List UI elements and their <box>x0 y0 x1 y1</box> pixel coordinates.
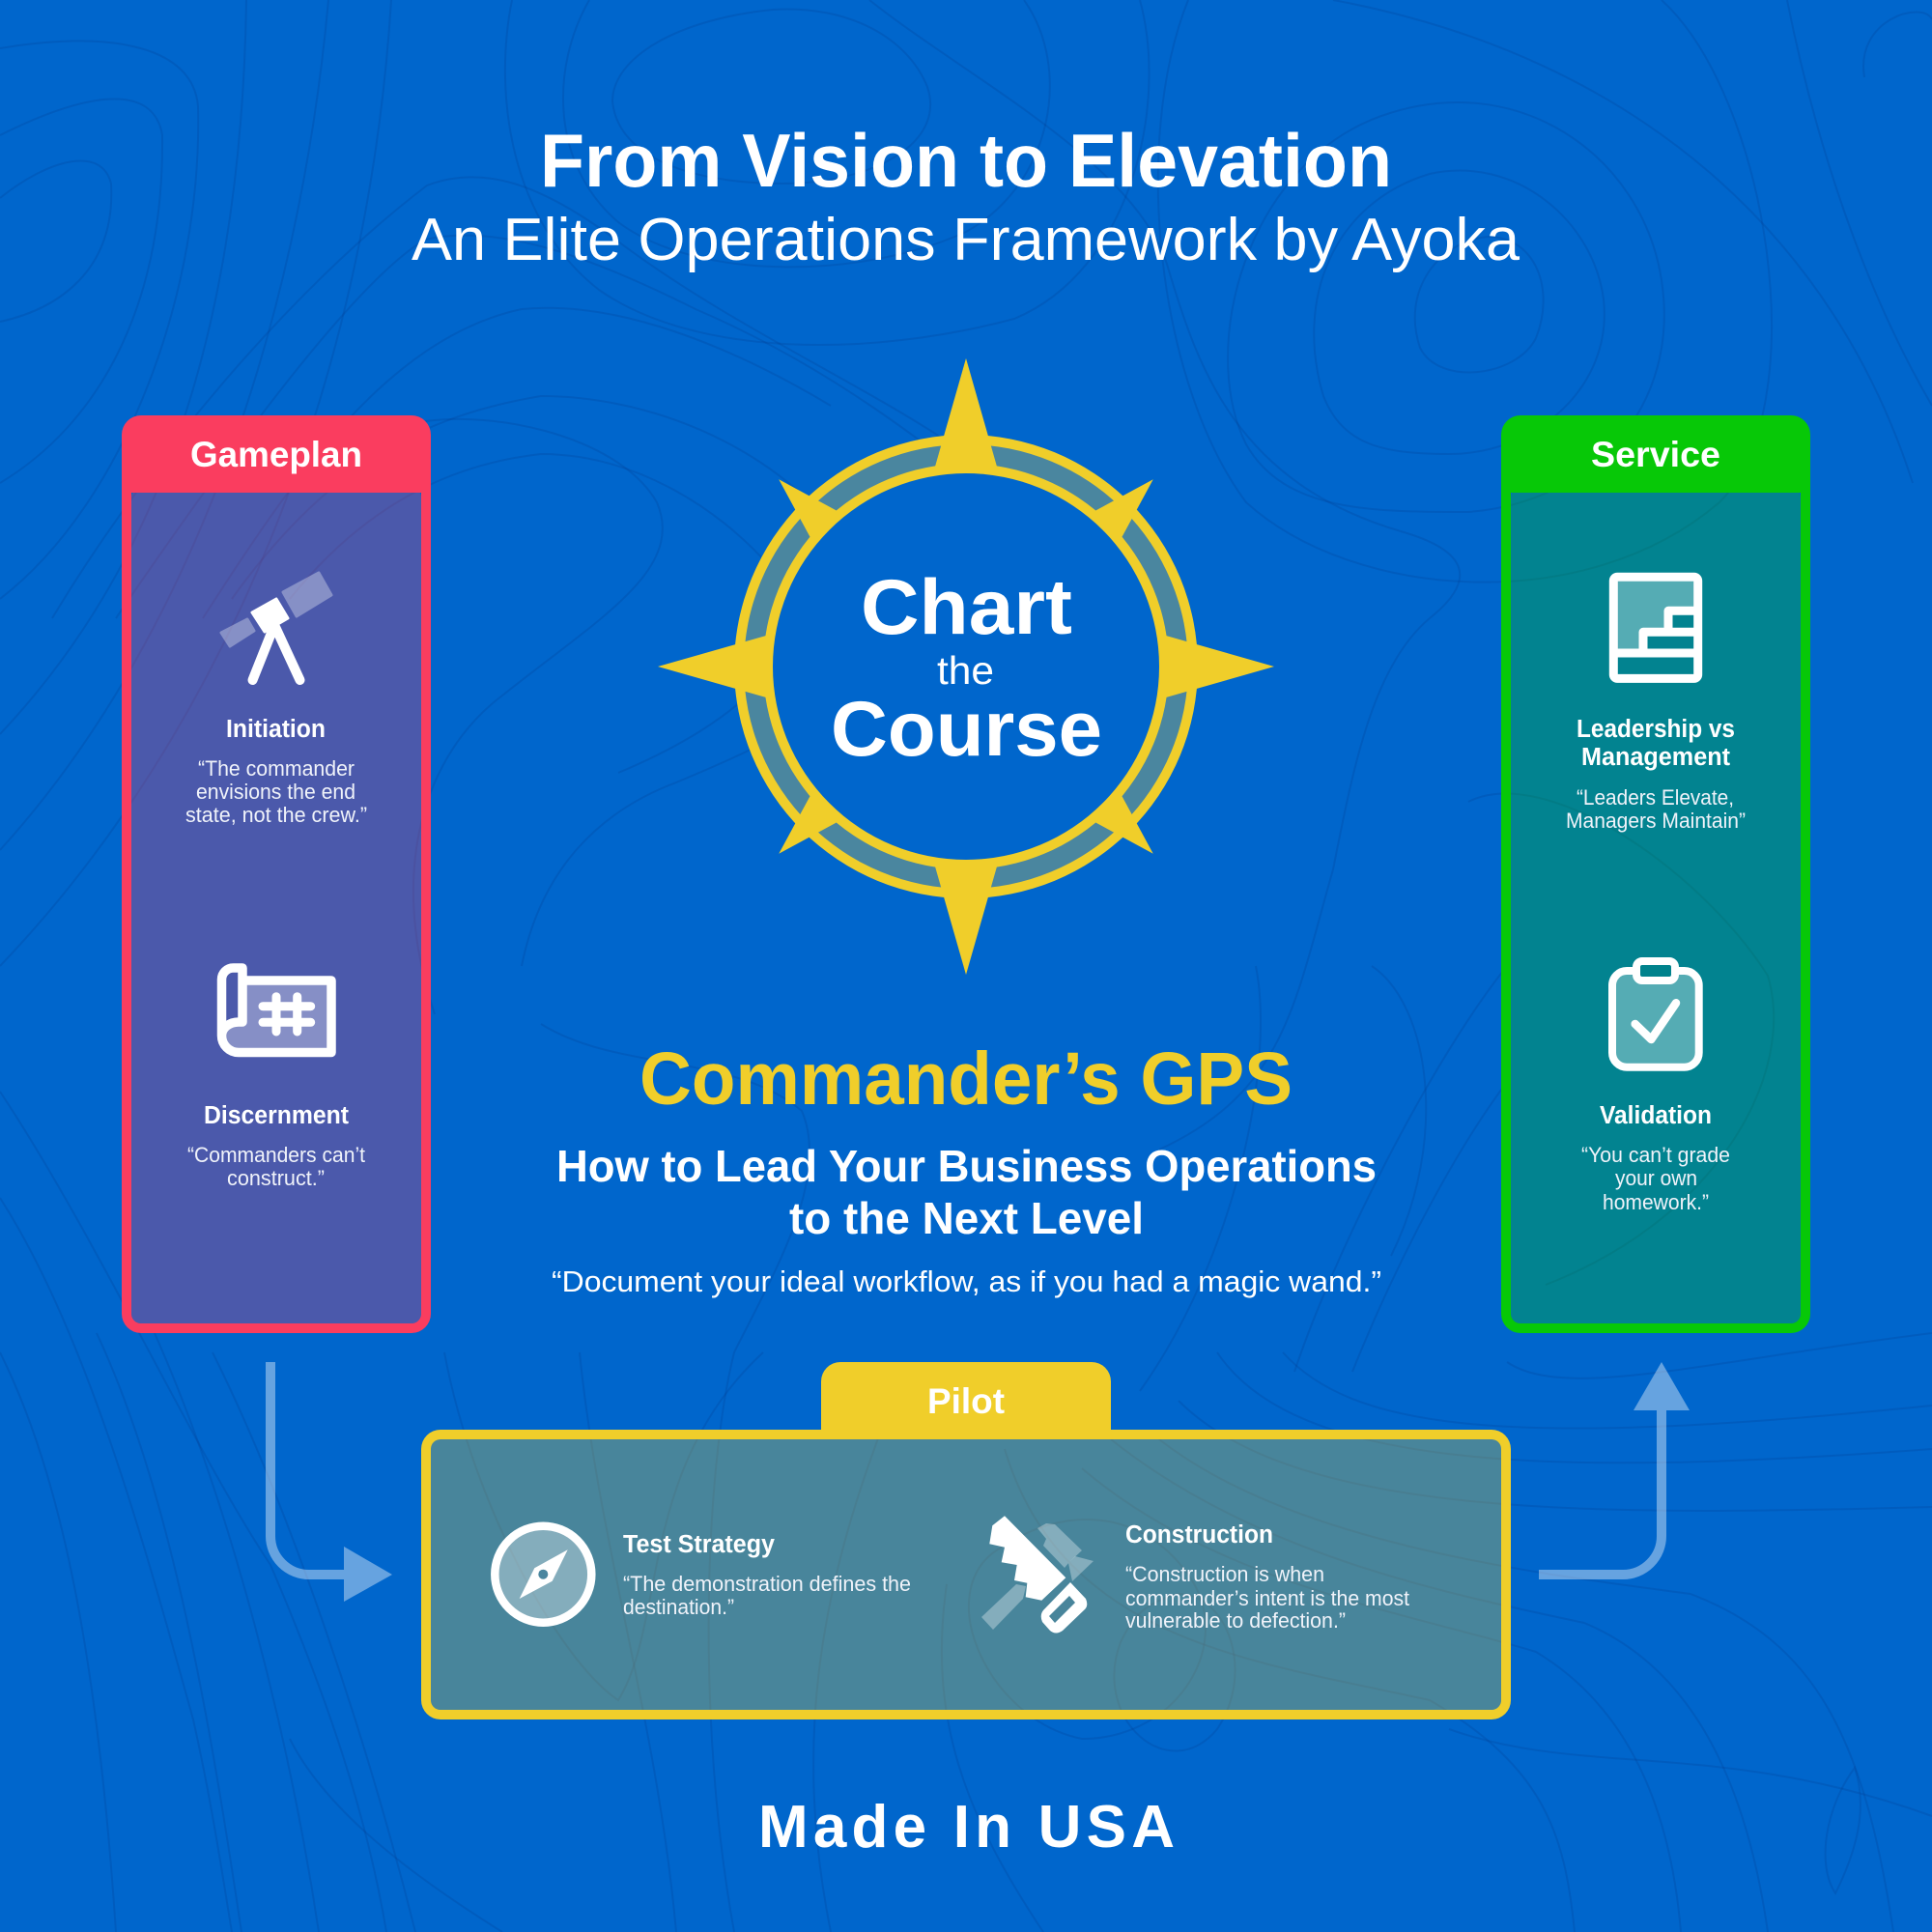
compass text <box>831 564 1102 773</box>
compass text: Course <box>831 686 1102 773</box>
footer: Made In USA: Made In USA <box>758 1794 1175 1861</box>
text: Validation: homework.” <box>1603 1190 1709 1214</box>
text: Validation: Validation <box>1600 1102 1712 1129</box>
heading: Pilot: Pilot <box>927 1381 1005 1421</box>
subtitle: An Elite Operations Framework by Ayoka <box>412 207 1520 273</box>
icon: stairs <box>1613 577 1698 678</box>
heading: Commander's GPS: Commander’s GPS <box>639 1037 1293 1121</box>
subheading <box>556 1141 1377 1243</box>
text: Initiation: envisions the end <box>196 780 355 804</box>
compass star points <box>658 358 1274 975</box>
text: Discernment: “Commanders can’t <box>187 1143 365 1167</box>
panel: Service <box>1501 415 1810 1333</box>
text: Leadership vs Management: Management <box>1581 744 1730 771</box>
text: Discernment <box>187 1102 365 1190</box>
text: Initiation: state, not the crew.” <box>185 803 367 827</box>
compass: Chart the Course <box>658 358 1274 975</box>
text: Construction <box>1125 1521 1409 1633</box>
panel: Pilot <box>421 1362 1511 1719</box>
text: Initiation <box>185 716 367 827</box>
compass text: the <box>937 648 994 693</box>
text: Construction: “Construction is when <box>1125 1562 1324 1586</box>
quote: “Document your ideal workflow, as if you had a magic wand.” <box>552 1264 1381 1298</box>
text: Leadership vs Management: Managers Maintain” <box>1566 809 1746 833</box>
subheading: to the Next Level <box>789 1193 1144 1243</box>
text: Validation <box>1581 1102 1730 1214</box>
heading: Service: Service <box>1591 435 1720 474</box>
text: Test Strategy <box>623 1531 911 1619</box>
arrow: Gameplan to Pilot <box>270 1362 392 1602</box>
icon: compass <box>495 1526 591 1623</box>
text: Discernment: Discernment <box>204 1102 349 1129</box>
text: Discernment: construct.” <box>227 1166 325 1190</box>
title: From Vision to Elevation <box>540 118 1392 203</box>
subheading: How to Lead Your Business Operations <box>556 1141 1377 1191</box>
text: Construction: vulnerable to defection.” <box>1125 1608 1346 1633</box>
text: Validation: your own <box>1615 1166 1697 1190</box>
text: Test Strategy: Test Strategy <box>623 1531 776 1558</box>
text: Leadership vs Management <box>1566 716 1746 833</box>
icon: clipboard <box>1612 961 1699 1067</box>
text: Initiation: Initiation <box>226 716 326 743</box>
text: Leadership vs Management: “Leaders Elevate, <box>1577 785 1734 810</box>
compass text: Chart <box>861 564 1072 651</box>
icon: blueprint <box>222 968 331 1053</box>
icon: saw and hammer <box>981 1516 1094 1633</box>
text: Test Strategy: destination.” <box>623 1595 734 1619</box>
text: Test Strategy: “The demonstration defines the <box>623 1572 911 1596</box>
text: Construction: Construction <box>1125 1521 1273 1548</box>
text: Construction: commander’s intent is the most <box>1125 1586 1409 1610</box>
panel: Gameplan <box>122 415 431 1333</box>
text: Initiation: “The commander <box>198 756 355 781</box>
heading: Gameplan: Gameplan <box>190 435 362 474</box>
text: Leadership vs Management: Leadership vs <box>1577 716 1735 743</box>
compass ring <box>734 435 1198 898</box>
icon: telescope <box>221 573 331 680</box>
arrow: Pilot to Service <box>1539 1362 1690 1575</box>
text: Validation: “You can’t grade <box>1581 1143 1730 1167</box>
